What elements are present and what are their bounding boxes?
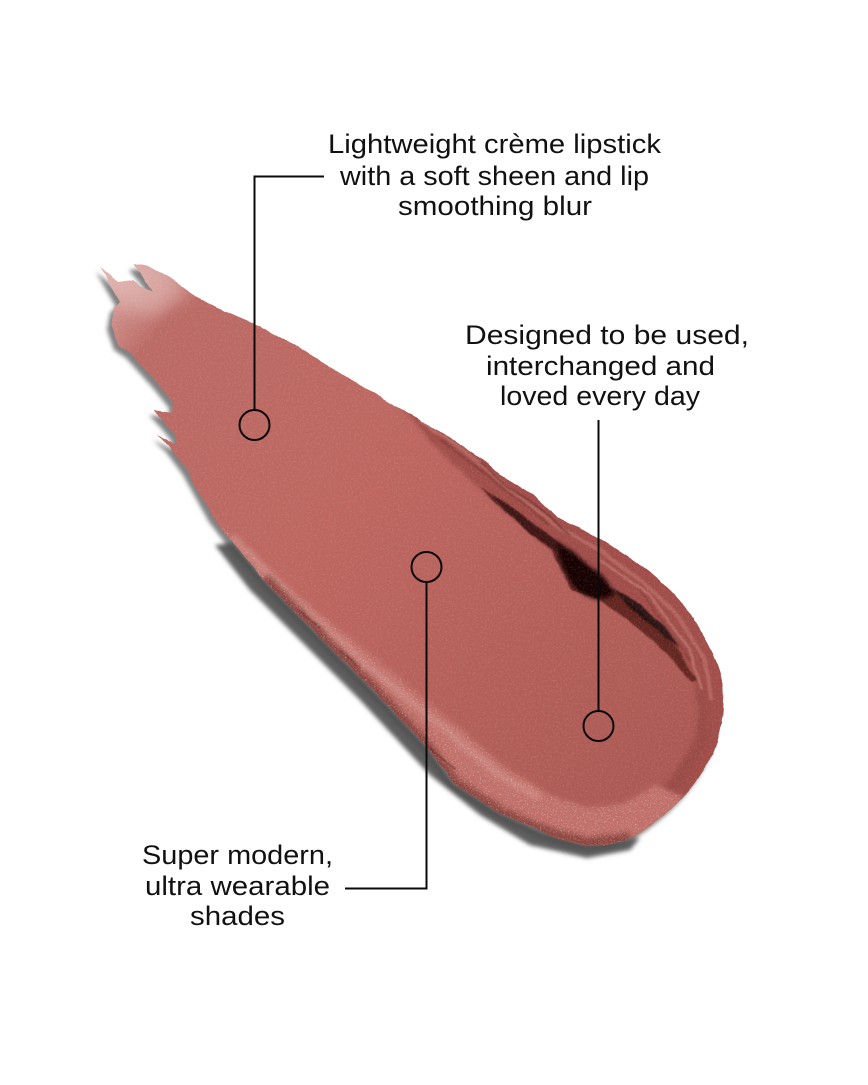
heading: super modern text: ultra wearable bbox=[145, 871, 330, 901]
heading: designed to be used text bbox=[465, 320, 749, 411]
lipstick swatch bbox=[95, 260, 735, 860]
lower ridge band bbox=[220, 523, 690, 855]
upper ridge band bbox=[400, 408, 724, 800]
ridge highlights bbox=[420, 420, 712, 700]
surface grain bbox=[95, 260, 730, 850]
heading: lightweight crème text: with a soft sheen and lip bbox=[339, 161, 649, 191]
heading: super modern text: Super modern, bbox=[142, 840, 333, 870]
heading: lightweight crème text: Lightweight crème lipstick bbox=[328, 129, 662, 159]
leader line and marker bbox=[345, 552, 442, 888]
heading: super modern text: shades bbox=[190, 901, 285, 931]
callout: super modern shades bbox=[142, 552, 442, 931]
infographic canvas bbox=[95, 133, 746, 926]
lower band sparkle bbox=[220, 524, 680, 846]
heading: designed to be used text: loved every day bbox=[500, 381, 701, 411]
deep crevice shadow bbox=[555, 540, 616, 600]
swatch shadow bbox=[96, 270, 719, 858]
heading: lightweight crème text: smoothing blur bbox=[398, 191, 592, 221]
heading: lightweight crème text bbox=[328, 129, 662, 221]
leader line and marker bbox=[584, 420, 614, 741]
dark crease bbox=[490, 492, 697, 682]
callout: designed for every day bbox=[465, 320, 749, 741]
heading: super modern text bbox=[142, 840, 333, 931]
leader line and marker bbox=[240, 176, 324, 440]
lower outer dark edge bbox=[265, 578, 630, 843]
heading: designed to be used text: Designed to be used, bbox=[465, 320, 749, 350]
callout: lightweight crème bbox=[240, 129, 662, 440]
heading: designed to be used text: interchanged and bbox=[486, 351, 715, 381]
paper-thin tip bbox=[95, 260, 190, 315]
